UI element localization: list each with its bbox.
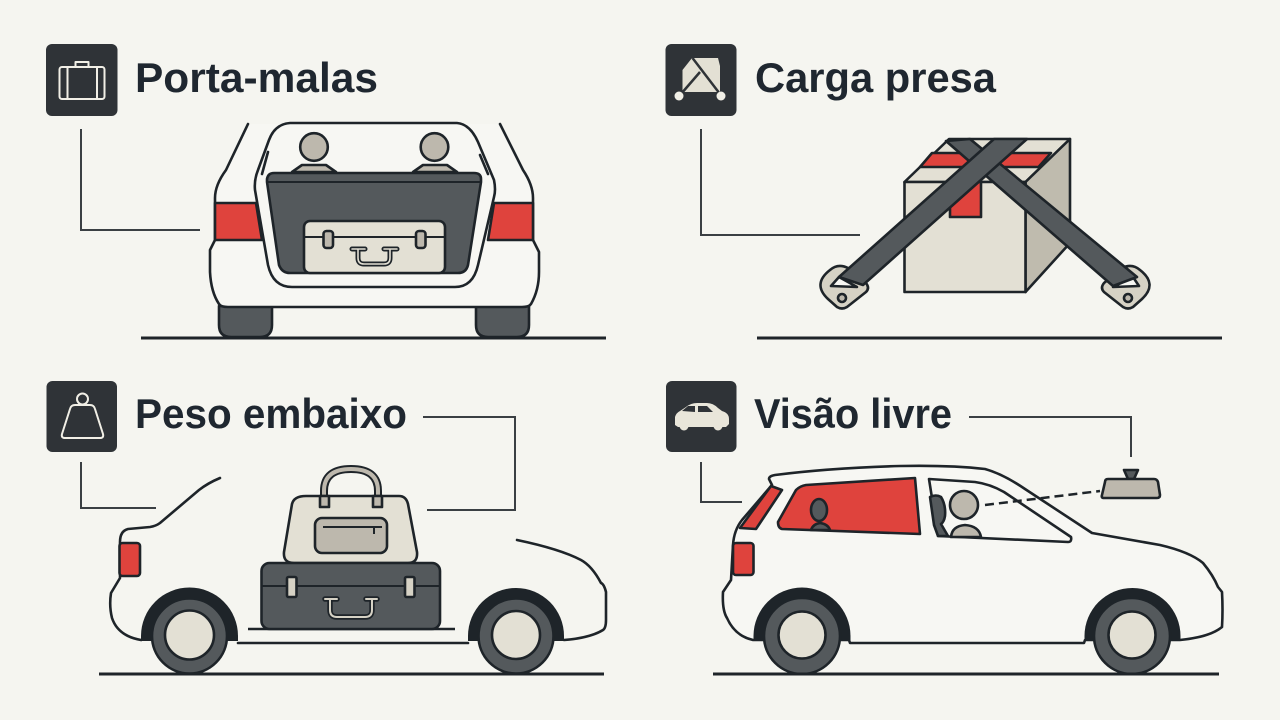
- suitcase: [304, 221, 445, 273]
- icon: strapped box: [666, 44, 736, 116]
- bag handle tips: [320, 496, 382, 507]
- panel: porta-malas: [46, 44, 606, 338]
- passenger behind driver: [930, 496, 948, 536]
- front window: [929, 479, 1071, 542]
- rear mirror: [1102, 470, 1160, 498]
- tail light: [733, 543, 754, 575]
- suitcase handle: [325, 599, 377, 617]
- wheels: [219, 306, 529, 337]
- callout line: [81, 129, 200, 230]
- callout lines: [701, 417, 1131, 502]
- panel: carga presa: [666, 44, 1222, 338]
- suitcase handle: [352, 249, 397, 264]
- anchor right: [1102, 266, 1150, 308]
- rear wheel: [141, 587, 238, 674]
- box: [904, 139, 1070, 292]
- icon: suitcase: [46, 44, 118, 116]
- strap left: [839, 139, 1027, 285]
- heading: Peso embaixo: Peso embaixo: [135, 390, 407, 437]
- panel: visão livre: [666, 381, 1222, 674]
- heading: Visão livre: Visão livre: [754, 390, 952, 437]
- red tape: [920, 153, 1051, 167]
- window frame lines: [262, 152, 488, 174]
- rear wheel: [754, 588, 850, 674]
- strap right: [946, 139, 1137, 286]
- anchor left: [820, 266, 868, 308]
- car rear view: [210, 123, 539, 337]
- car outline: [110, 478, 220, 640]
- bag handle: [324, 469, 378, 507]
- passengers: [292, 133, 457, 172]
- duffel bag: [284, 496, 417, 563]
- panel: peso embaixo: [46, 381, 606, 674]
- callout line: [701, 129, 860, 235]
- front wheel: [1084, 588, 1180, 674]
- icon: weight: [46, 381, 117, 452]
- callout lines: [81, 417, 515, 510]
- sight line: [985, 491, 1100, 505]
- ground line: [99, 672, 604, 676]
- trunk interior: [267, 173, 481, 273]
- heading: Porta-malas: Porta-malas: [135, 54, 378, 101]
- trunk opening: [255, 123, 495, 287]
- car body: [210, 124, 539, 307]
- driver: [950, 491, 981, 537]
- tail light: [120, 543, 140, 576]
- car body: [723, 466, 1222, 643]
- bag pocket: [315, 518, 387, 553]
- rear narrow window: [740, 486, 782, 529]
- icon: car: [666, 381, 736, 452]
- dark suitcase: [262, 563, 440, 629]
- front wheel: [468, 588, 564, 674]
- car side view, closed: [723, 466, 1222, 674]
- heading: Carga presa: Carga presa: [755, 54, 997, 101]
- side window highlighted: [778, 478, 920, 534]
- ground line: [757, 336, 1222, 340]
- car side view, open: [99, 469, 606, 674]
- shelf: [248, 628, 455, 630]
- ground line: [141, 336, 606, 340]
- ground line: [713, 672, 1219, 676]
- tail lights: [215, 203, 262, 240]
- rear passenger: [811, 499, 830, 530]
